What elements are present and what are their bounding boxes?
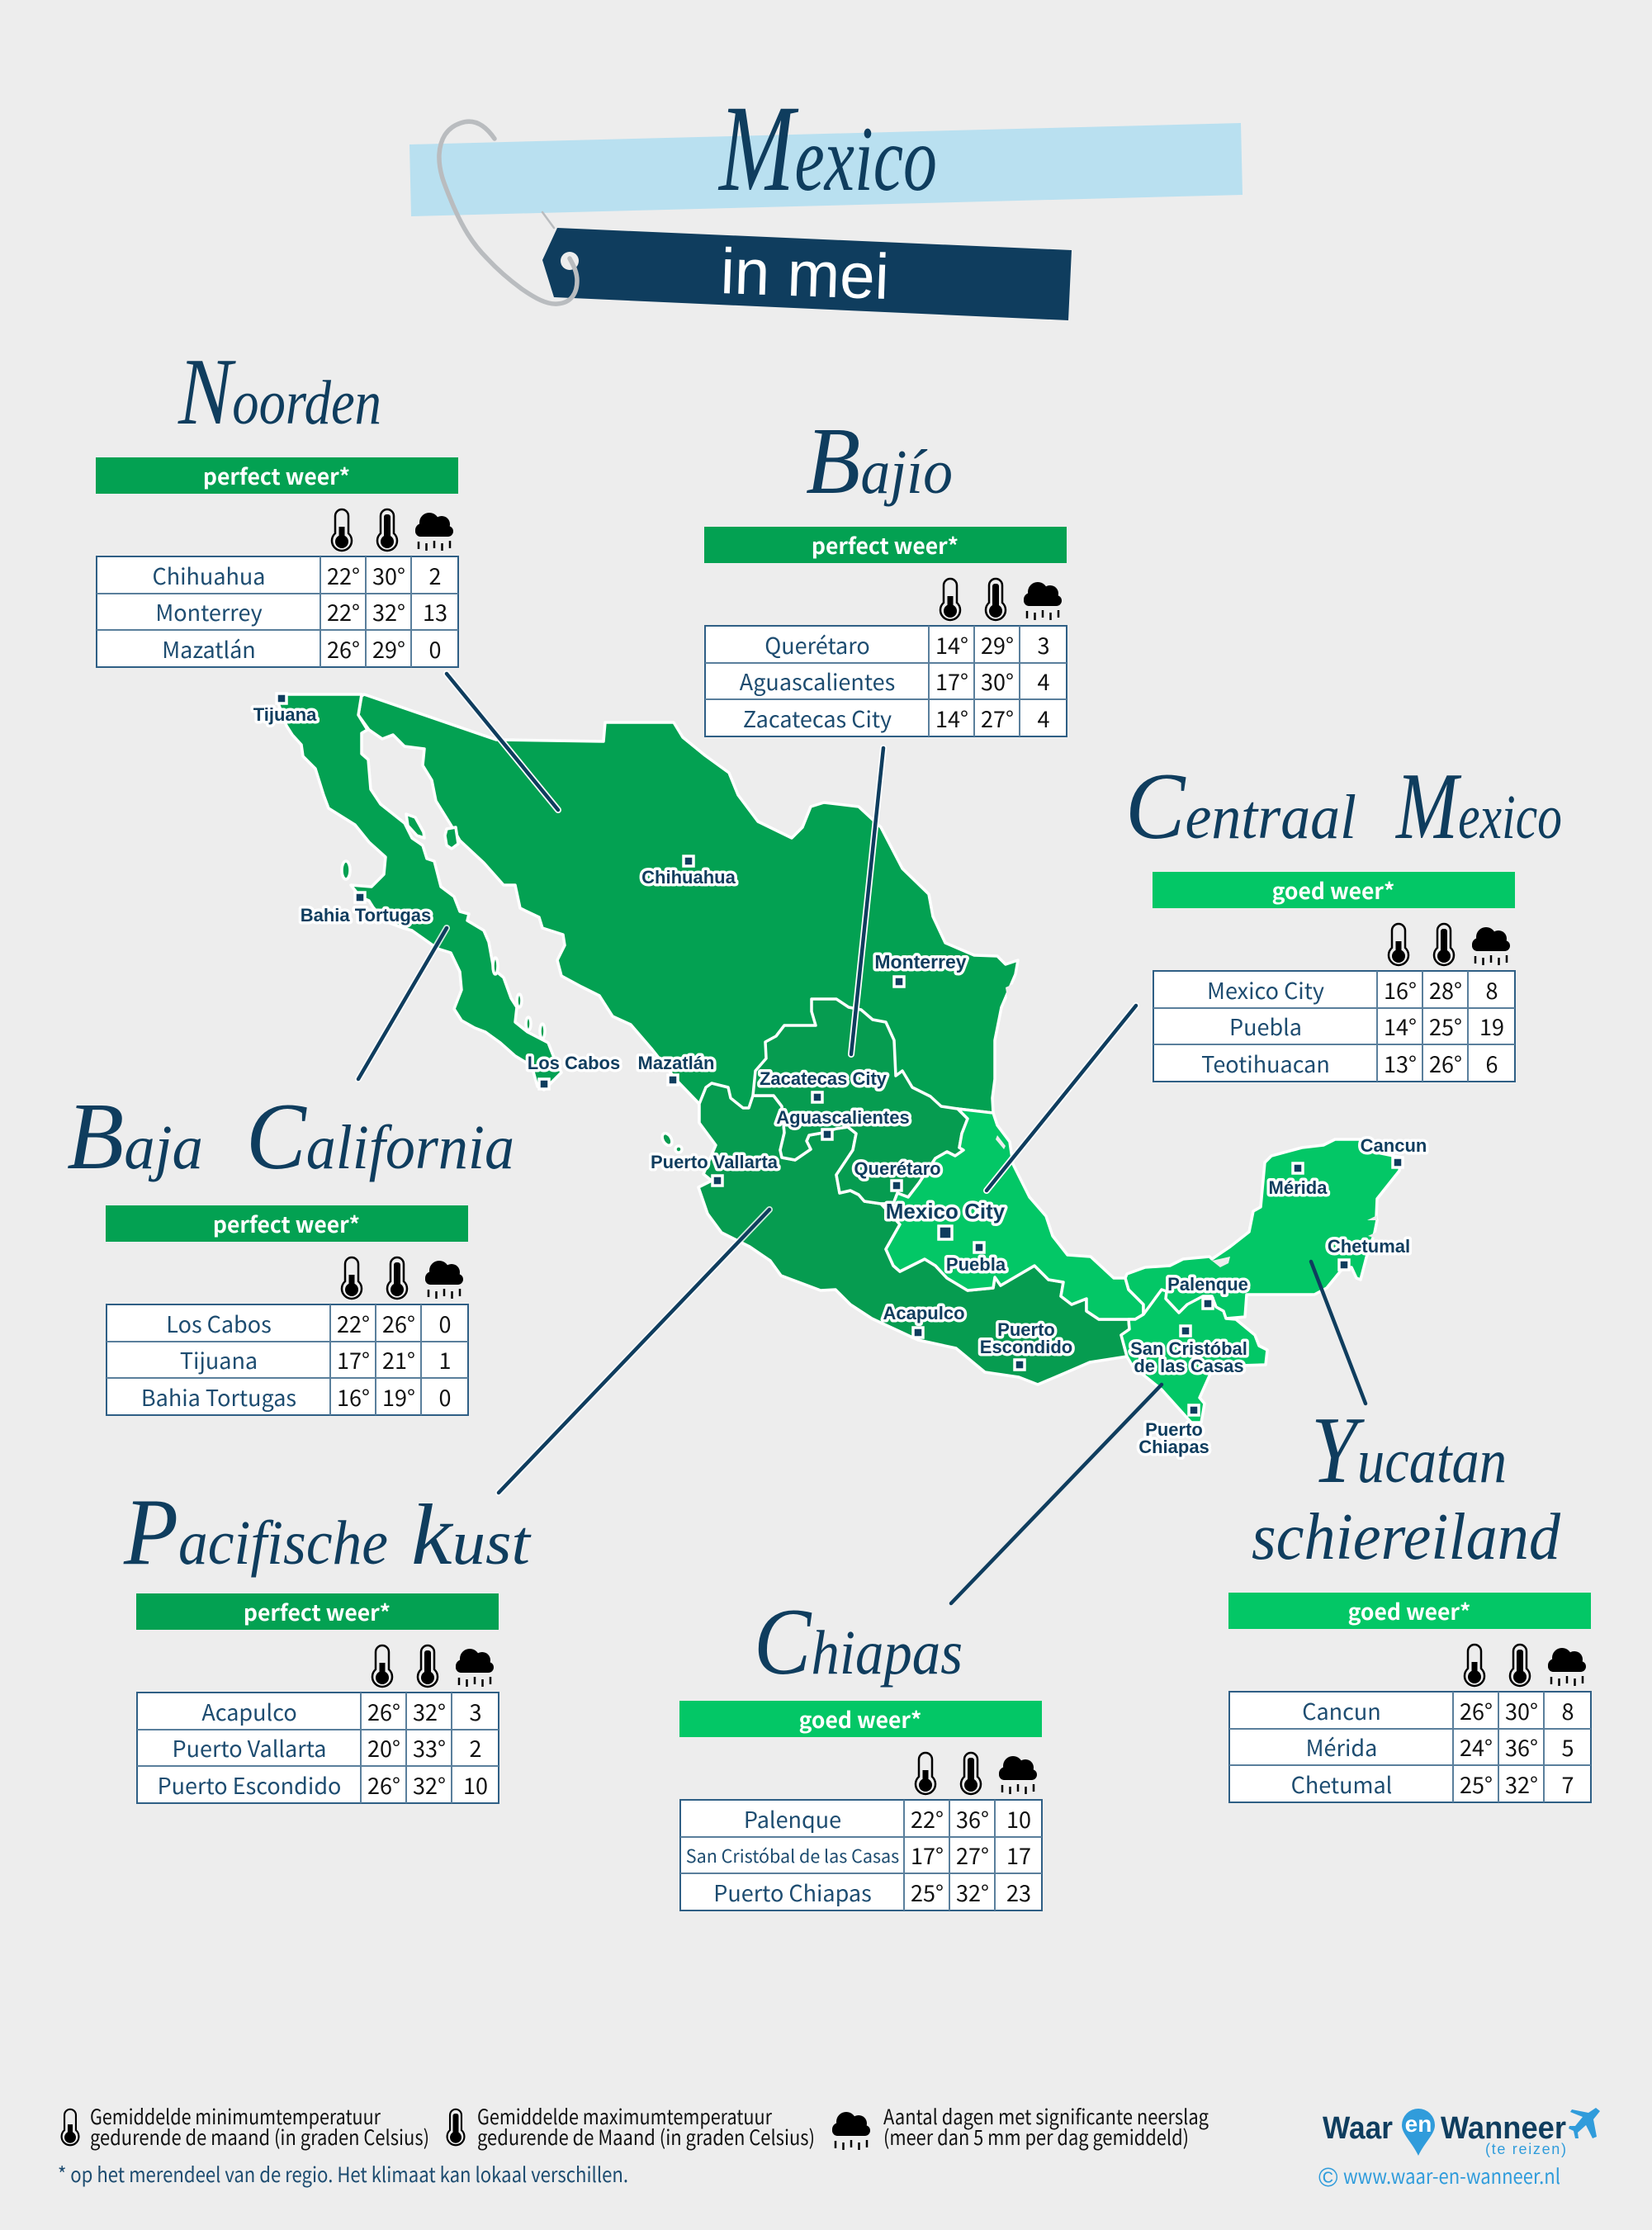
city markers and labels bbox=[253, 694, 1427, 1457]
city: Puerto Vallarta: Puerto Vallarta bbox=[651, 1152, 779, 1172]
callout line: Noorden bbox=[447, 674, 558, 810]
climate table: 19° bbox=[382, 1380, 415, 1413]
panel: Pacifische kust bbox=[123, 1480, 532, 1803]
city: Palenque bbox=[1167, 1274, 1248, 1309]
status bar bbox=[1153, 872, 1515, 908]
city: Puerto Chiapas bbox=[1138, 1405, 1209, 1457]
legend: maximum temperature bbox=[447, 2101, 815, 2152]
climate table: Mazatlán bbox=[162, 632, 256, 665]
city: Mexico City: Mexico City bbox=[886, 1199, 1006, 1224]
weather icons bbox=[1465, 1645, 1586, 1686]
climate table: 6 bbox=[1486, 1047, 1498, 1079]
callout line: Pacifische kust bbox=[499, 1210, 769, 1493]
city: Chihuahua: Chihuahua bbox=[641, 867, 736, 888]
climate table: 10 bbox=[463, 1768, 488, 1801]
city: Puebla: Puebla bbox=[946, 1254, 1006, 1275]
climate table: 22° bbox=[911, 1802, 944, 1835]
heading: Bajio: Bajío bbox=[806, 409, 953, 514]
status bar bbox=[136, 1593, 499, 1630]
logo: Waar en Wanneer bbox=[1318, 2108, 1600, 2192]
climate table: Bahia Tortugas bbox=[141, 1380, 296, 1413]
climate table: 22° bbox=[327, 595, 360, 627]
climate table: Puerto Escondido bbox=[158, 1768, 341, 1801]
climate table: 16° bbox=[1384, 973, 1417, 1006]
climate table: 14° bbox=[935, 628, 968, 660]
climate table bbox=[1153, 971, 1515, 1082]
climate table: 30° bbox=[372, 559, 405, 591]
region: Bajio bbox=[753, 999, 968, 1204]
callout line: Baja California bbox=[358, 928, 447, 1079]
city: Aguascalientes bbox=[776, 1107, 910, 1139]
climate table: 26° bbox=[382, 1307, 415, 1339]
weather icons bbox=[940, 579, 1062, 620]
icon: airplane bbox=[1569, 2108, 1600, 2138]
climate table: 32° bbox=[413, 1695, 446, 1727]
city: Zacatecas City bbox=[760, 1068, 888, 1102]
climate table: 4 bbox=[1037, 702, 1050, 734]
climate table: 32° bbox=[956, 1876, 989, 1908]
climate table: 17° bbox=[935, 665, 968, 697]
city: Los Cabos: Los Cabos bbox=[528, 1053, 620, 1073]
city: Puerto Chiapas: Chiapas bbox=[1138, 1437, 1209, 1457]
climate table: 8 bbox=[1486, 973, 1498, 1006]
climate table: 1 bbox=[439, 1343, 451, 1375]
city: Aguascalientes: Aguascalientes bbox=[776, 1107, 910, 1128]
climate table: 13° bbox=[1384, 1047, 1417, 1079]
climate table: 26° bbox=[327, 632, 360, 665]
climate table: 32° bbox=[413, 1768, 446, 1801]
climate table: 3 bbox=[469, 1695, 482, 1727]
climate table bbox=[107, 1304, 468, 1415]
city: Mexico City bbox=[886, 1199, 1006, 1239]
logo: Waar en Wanneer: (te reizen) bbox=[1485, 2141, 1566, 2157]
climate table bbox=[705, 626, 1067, 736]
city: Puerto Escondido: Puerto bbox=[997, 1319, 1055, 1340]
status bar bbox=[1228, 1593, 1591, 1629]
climate table: Palenque bbox=[744, 1802, 841, 1835]
city: San Cristobal de las Casas: de las Casas bbox=[1134, 1356, 1244, 1376]
city: Zacatecas City: Zacatecas City bbox=[760, 1068, 888, 1089]
climate table: 22° bbox=[327, 559, 360, 591]
islands bbox=[342, 814, 682, 1153]
climate table bbox=[97, 556, 458, 667]
heading: Centraal Mexico bbox=[1125, 754, 1562, 859]
region: Pacifische kust bbox=[698, 1083, 1129, 1385]
city: Bahia Tortugas: Bahia Tortugas bbox=[301, 905, 431, 926]
subtitle tag bbox=[542, 228, 1072, 320]
climate table: 3 bbox=[1037, 628, 1050, 660]
status bar: perfect weer* bbox=[203, 459, 350, 491]
panel: Bajio bbox=[704, 409, 1067, 736]
legend: precipitation bbox=[832, 2101, 1209, 2152]
heading: Pacifische kust bbox=[123, 1480, 532, 1584]
panel: Chiapas bbox=[679, 1589, 1042, 1910]
climate table: 29° bbox=[981, 628, 1014, 660]
legend: precipitation: Aantal dagen met significante neerslag bbox=[883, 2101, 1209, 2131]
map of Mexico bbox=[277, 694, 1402, 1423]
climate table: 26° bbox=[367, 1768, 400, 1801]
legend: precipitation: (meer dan 5 mm per dag gemiddeld) bbox=[883, 2122, 1189, 2152]
climate table: Aguascalientes bbox=[740, 665, 895, 697]
climate table: Acapulco bbox=[201, 1695, 297, 1727]
climate table bbox=[137, 1693, 499, 1803]
status bar bbox=[106, 1205, 468, 1242]
icon: location pin bbox=[1402, 2109, 1435, 2156]
climate table: 5 bbox=[1562, 1730, 1574, 1763]
climate table: Puerto Vallarta bbox=[173, 1731, 326, 1764]
heading: Centraal Mexico: Centraal bbox=[1125, 754, 1356, 859]
climate table: 25° bbox=[911, 1876, 944, 1908]
website: www.waar-en-wanneer.nl bbox=[1343, 2161, 1560, 2190]
climate table: 19 bbox=[1479, 1010, 1504, 1042]
climate table bbox=[680, 1800, 1042, 1910]
climate table: Mérida bbox=[1306, 1730, 1377, 1763]
callout line: Bajio bbox=[851, 748, 883, 1054]
city: Tijuana bbox=[253, 694, 317, 725]
city: Puerto Vallarta bbox=[651, 1152, 779, 1186]
city: Merida bbox=[1269, 1163, 1328, 1198]
status bar: goed weer* bbox=[1348, 1594, 1470, 1626]
city: Acapulco: Acapulco bbox=[883, 1303, 965, 1323]
legend: minimum temperature bbox=[62, 2101, 429, 2152]
climate table: 23 bbox=[1006, 1876, 1031, 1908]
climate table: 26° bbox=[1429, 1047, 1462, 1079]
city: Monterrey: Monterrey bbox=[874, 951, 967, 973]
footnote: * op het merendeel van de regio. Het klimaat kan lokaal verschillen. bbox=[58, 2159, 628, 2189]
climate table: 8 bbox=[1562, 1694, 1574, 1726]
city: Cancun bbox=[1361, 1135, 1427, 1167]
city: Puerto Escondido bbox=[980, 1319, 1072, 1370]
climate table: 36° bbox=[1505, 1730, 1538, 1763]
logo: Waar en Wanneer: Wanneer bbox=[1441, 2111, 1566, 2146]
legend: maximum temperature: Gemiddelde maximumtemperatuur bbox=[477, 2101, 772, 2131]
title banner bbox=[409, 80, 1243, 217]
panel: Yucatan schiereiland bbox=[1228, 1398, 1591, 1802]
climate table: 0 bbox=[429, 632, 441, 665]
climate table: 26° bbox=[1460, 1694, 1493, 1726]
heading: Yucatan schiereiland: Yucatan bbox=[1311, 1398, 1507, 1503]
climate table: Puebla bbox=[1229, 1010, 1302, 1042]
panel: Noorden bbox=[96, 339, 458, 667]
climate table: 13 bbox=[423, 595, 447, 627]
weather icons bbox=[372, 1645, 494, 1687]
region: Baja California bbox=[277, 694, 561, 1090]
climate table: 30° bbox=[981, 665, 1014, 697]
climate table: 27° bbox=[981, 702, 1014, 734]
climate table: San Cristóbal de las Casas bbox=[686, 1843, 899, 1868]
legend: maximum temperature: gedurende de Maand (in graden Celsius) bbox=[477, 2122, 815, 2152]
status bar bbox=[679, 1701, 1042, 1737]
climate table: 17 bbox=[1006, 1839, 1031, 1871]
status bar bbox=[704, 527, 1067, 563]
climate table: 17° bbox=[911, 1839, 944, 1871]
city: Palenque: Palenque bbox=[1167, 1274, 1248, 1295]
climate table: 0 bbox=[439, 1307, 451, 1339]
weather icons bbox=[916, 1753, 1037, 1794]
climate table: 14° bbox=[935, 702, 968, 734]
panel: Baja California bbox=[67, 1084, 514, 1415]
climate table: 2 bbox=[429, 559, 441, 591]
city: Puebla bbox=[946, 1243, 1006, 1275]
city: San Cristobal de las Casas: San Cristóbal bbox=[1130, 1338, 1247, 1359]
region: Chiapas bbox=[1121, 1290, 1267, 1423]
climate table: Chihuahua bbox=[152, 559, 266, 591]
climate table: 2 bbox=[469, 1731, 482, 1764]
city: Acapulco bbox=[883, 1303, 965, 1338]
heading: Yucatan schiereiland: schiereiland bbox=[1252, 1501, 1561, 1574]
climate table: 14° bbox=[1384, 1010, 1417, 1042]
city: Chihuahua bbox=[641, 856, 736, 888]
climate table: Teotihuacan bbox=[1201, 1047, 1330, 1079]
legend bbox=[58, 2101, 1209, 2189]
climate table: Los Cabos bbox=[166, 1307, 272, 1339]
city: Chetumal bbox=[1328, 1236, 1410, 1270]
heading: Baja California: Baja bbox=[67, 1084, 203, 1189]
climate table: 17° bbox=[337, 1343, 370, 1375]
status bar: perfect weer* bbox=[213, 1207, 360, 1239]
city: Mazatlan bbox=[638, 1053, 714, 1085]
city: Bahia Tortugas bbox=[301, 892, 431, 926]
climate table: 26° bbox=[367, 1695, 400, 1727]
climate table: Puerto Chiapas bbox=[713, 1876, 872, 1908]
icon: location pin: en bbox=[1405, 2111, 1432, 2137]
climate table: Monterrey bbox=[155, 595, 263, 627]
subtitle: in mei: in mei bbox=[719, 234, 890, 313]
city: Chetumal: Chetumal bbox=[1328, 1236, 1410, 1257]
city: San Cristobal de las Casas bbox=[1130, 1326, 1247, 1376]
climate table: 27° bbox=[956, 1839, 989, 1871]
climate table: 16° bbox=[337, 1380, 370, 1413]
climate table: 10 bbox=[1006, 1802, 1031, 1835]
climate table: 4 bbox=[1037, 665, 1050, 697]
heading: Pacifische kust: kust bbox=[411, 1486, 532, 1583]
legend: minimum temperature: gedurende de maand (in graden Celsius) bbox=[90, 2122, 429, 2152]
climate table: 33° bbox=[413, 1731, 446, 1764]
city: Los Cabos bbox=[528, 1053, 620, 1089]
city: Merida: Mérida bbox=[1269, 1177, 1328, 1198]
heading: Yucatan schiereiland bbox=[1252, 1398, 1561, 1574]
city: Mazatlan: Mazatlán bbox=[638, 1053, 714, 1073]
city: Puerto Escondido: Escondido bbox=[980, 1337, 1072, 1357]
city: Cancun: Cancun bbox=[1361, 1135, 1427, 1156]
weather icons bbox=[1389, 924, 1510, 965]
heading: Baja California bbox=[67, 1084, 514, 1189]
region: Noorden bbox=[358, 694, 1018, 1156]
climate table: 20° bbox=[367, 1731, 400, 1764]
climate table: 21° bbox=[382, 1343, 415, 1375]
weather icons bbox=[332, 509, 453, 551]
website: © bbox=[1318, 2162, 1338, 2192]
city: Queretaro: Querétaro bbox=[854, 1158, 941, 1179]
climate table: Chetumal bbox=[1291, 1768, 1392, 1800]
climate table: 30° bbox=[1505, 1694, 1538, 1726]
region: Centraal Mexico bbox=[881, 1109, 1143, 1319]
climate table: 22° bbox=[337, 1307, 370, 1339]
city: Queretaro bbox=[854, 1158, 941, 1191]
climate table: Querétaro bbox=[764, 628, 870, 660]
climate table: 25° bbox=[1429, 1010, 1462, 1042]
climate table: Zacatecas City bbox=[743, 702, 892, 734]
heading: Pacifische kust: Pacifische bbox=[123, 1480, 388, 1584]
climate table: 7 bbox=[1562, 1768, 1574, 1800]
status bar bbox=[96, 457, 458, 494]
weather icons bbox=[342, 1257, 463, 1299]
region: Yucatan schiereiland bbox=[1125, 1139, 1402, 1321]
tag ring bbox=[439, 121, 577, 304]
climate table: Mexico City bbox=[1207, 973, 1324, 1006]
climate table: 32° bbox=[1505, 1768, 1538, 1800]
climate table: 36° bbox=[956, 1802, 989, 1835]
status bar: goed weer* bbox=[799, 1702, 921, 1735]
legend: minimum temperature: Gemiddelde minimumtemperatuur bbox=[90, 2101, 381, 2131]
heading: Baja California: California bbox=[246, 1084, 514, 1189]
title: Mexico: Mexico bbox=[718, 80, 937, 217]
lagoons bbox=[996, 984, 1377, 1267]
climate table: 28° bbox=[1429, 973, 1462, 1006]
status bar: goed weer* bbox=[1272, 874, 1394, 906]
status bar: perfect weer* bbox=[244, 1595, 391, 1627]
heading: Centraal Mexico: Mexico bbox=[1394, 754, 1562, 859]
city: Puerto Chiapas: Puerto bbox=[1145, 1419, 1203, 1440]
city: Monterrey bbox=[874, 951, 967, 987]
callout line: Yucatan bbox=[1311, 1262, 1366, 1404]
heading: Chiapas: Chiapas bbox=[754, 1589, 963, 1694]
climate table: Cancun bbox=[1302, 1694, 1381, 1726]
climate table: 32° bbox=[372, 595, 405, 627]
heading: Noorden: Noorden bbox=[178, 339, 381, 444]
logo: Waar en Wanneer: Waar bbox=[1323, 2111, 1393, 2146]
callout line: Centraal Mexico bbox=[987, 1006, 1136, 1191]
climate table: 24° bbox=[1460, 1730, 1493, 1763]
status bar: perfect weer* bbox=[812, 528, 959, 561]
panel: Centraal Mexico bbox=[1125, 754, 1562, 1082]
climate table bbox=[1229, 1692, 1591, 1802]
climate table: 29° bbox=[372, 632, 405, 665]
callout line: Chiapas bbox=[951, 1385, 1162, 1603]
climate table: Tijuana bbox=[180, 1343, 258, 1375]
climate table: 25° bbox=[1460, 1768, 1493, 1800]
climate table: 0 bbox=[439, 1380, 451, 1413]
city: Tijuana: Tijuana bbox=[253, 704, 317, 725]
